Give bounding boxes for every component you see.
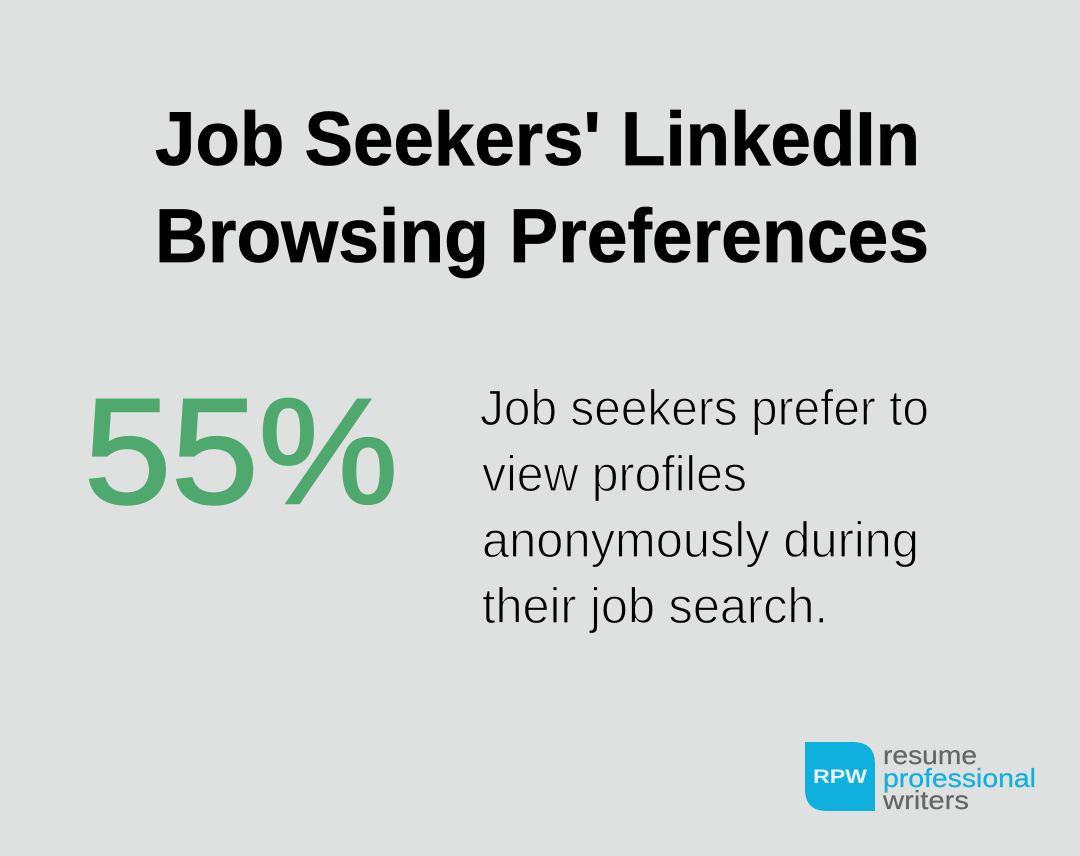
- logo wordmark: writers: [882, 785, 969, 815]
- title: Browsing Preferences: [155, 194, 929, 279]
- logo wordmark: resume: [883, 740, 977, 770]
- logo badge: [805, 742, 875, 811]
- title: Job Seekers' LinkedIn: [155, 97, 920, 182]
- logo wordmark: professional: [883, 763, 1036, 793]
- logo: resume professional writers: [805, 740, 1036, 815]
- description text: [480, 380, 929, 634]
- logo initials: RPW: [813, 767, 867, 788]
- description text: anonymously during: [482, 512, 919, 568]
- description text: Job seekers prefer to: [480, 380, 929, 436]
- description text: view profiles: [482, 446, 747, 502]
- description text: their job search.: [482, 578, 828, 634]
- logo wordmark: [882, 740, 1036, 815]
- statistic: 55%: 55%: [84, 367, 398, 535]
- title: [155, 97, 929, 279]
